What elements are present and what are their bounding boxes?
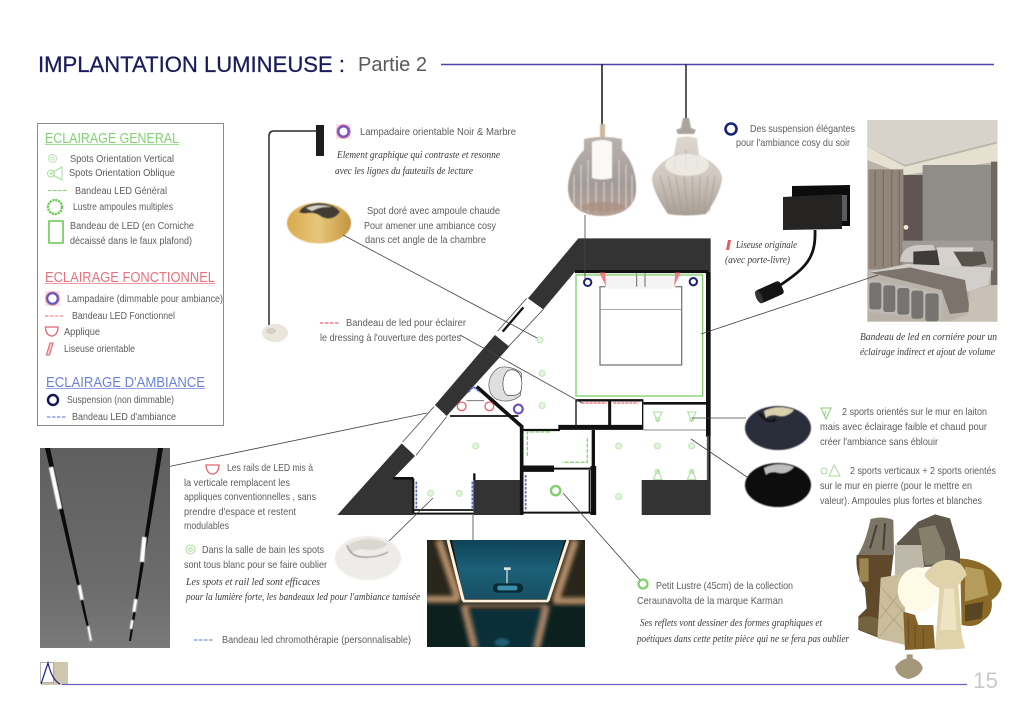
reading light markers bbox=[599, 273, 681, 287]
script note: bedroom: Bandeau de led en corniére pour un bbox=[860, 332, 997, 343]
text: led rails: modulables bbox=[184, 520, 229, 532]
text: dressing led strip bbox=[320, 317, 466, 344]
icon: floor lamp bbox=[45, 291, 60, 306]
text: small chandelier: Petit Lustre (45cm) de la collection bbox=[656, 580, 793, 592]
image: chandelier bbox=[856, 514, 1002, 679]
connector: bedroom photo bbox=[701, 275, 878, 334]
pendant: faceted glass bbox=[652, 118, 722, 216]
interior walls bbox=[393, 272, 710, 515]
right amber body bbox=[960, 558, 1002, 626]
image: bathroom photo bbox=[427, 540, 585, 647]
text: chromotherapy strip: Bandeau led chromothérapie (personnalisable) bbox=[222, 634, 411, 646]
script note: liseuse bbox=[725, 240, 797, 266]
image: white spot bbox=[335, 536, 401, 580]
title: IMPLANTATION LUMINEUSE : bbox=[38, 52, 345, 77]
legend text: spots oblique: Spots Orientation Oblique bbox=[69, 168, 175, 179]
wall lights bbox=[457, 402, 494, 411]
text: dressing led strip: Bandeau de led pour éclairer bbox=[346, 317, 466, 329]
legend text: suspension: Suspension (non dimmable) bbox=[67, 395, 174, 406]
page number: 15 bbox=[973, 668, 998, 693]
dressing led strips bbox=[582, 401, 638, 405]
connector: pendants bbox=[584, 215, 586, 280]
connector: rail photo bbox=[162, 413, 427, 468]
script note: liseuse: Liseuse originale bbox=[735, 240, 797, 251]
script note: spots and rails bbox=[185, 577, 420, 603]
image: led rail photo bbox=[40, 448, 170, 648]
floor plan bbox=[337, 238, 711, 515]
green led strips bbox=[527, 432, 587, 462]
legend text: bandeau fonctionnel: Bandeau LED Fonctionnel bbox=[72, 311, 175, 322]
top center bbox=[897, 514, 960, 568]
image: bedroom photo bbox=[867, 120, 997, 322]
text: bathroom spots: Dans la salle de bain les spots bbox=[202, 544, 324, 556]
script note: spots and rails: pour la lumière forte, les bandeaux led pour l'ambiance tamisée bbox=[185, 592, 420, 603]
heading: eclairage fonctionnel: ECLAIRAGE FONCTIONNEL bbox=[45, 269, 215, 286]
text: led rails bbox=[184, 462, 316, 532]
text: lampadaire: Lampadaire orientable Noir & Marbre bbox=[360, 126, 516, 138]
script note: lampadaire: avec les lignes du fauteuils de lecture bbox=[335, 166, 473, 177]
icon: vertical spot bbox=[48, 154, 56, 162]
text: white spots on stone wall bbox=[820, 465, 996, 507]
legend text: spots vertical: Spots Orientation Vertical bbox=[70, 154, 174, 165]
connector: bathroom photo bbox=[472, 515, 474, 542]
image: floor lamp bbox=[262, 125, 324, 342]
oblique spots bbox=[653, 412, 696, 479]
icon: suspension marker bbox=[726, 124, 736, 134]
text: small chandelier bbox=[637, 580, 793, 607]
image: pendant lights bbox=[568, 64, 722, 216]
header rule bbox=[441, 64, 994, 66]
script note: lampadaire bbox=[335, 150, 500, 177]
text: suspensions: pour l'ambiance cosy du soir bbox=[736, 137, 850, 149]
icon: oblique spot bbox=[48, 167, 62, 180]
blue led strips bbox=[416, 387, 526, 510]
small pendant bbox=[895, 654, 923, 679]
pendant: rounded glass bbox=[568, 124, 636, 216]
text: bathroom spots: sont tous blanc pour se faire oublier bbox=[184, 559, 327, 571]
icon: ambience led strip bbox=[47, 416, 66, 418]
text: led rails: appliques conventionnelles , sans bbox=[184, 491, 316, 503]
image: reading lamp bbox=[753, 185, 850, 304]
legend text: lustre: Lustre ampoules multiples bbox=[73, 202, 173, 213]
script note: chandelier: Ses reflets vont dessiner des formes graphiques et bbox=[640, 618, 823, 629]
panel: legend bbox=[38, 124, 224, 426]
pendant markers bbox=[584, 278, 697, 286]
image: dark navy spot bbox=[745, 406, 811, 450]
vertical spots bbox=[428, 337, 695, 500]
legend text: liseuse: Liseuse orientable bbox=[64, 344, 135, 355]
script note: liseuse: (avec porte-livre) bbox=[725, 255, 790, 266]
script note: bedroom: éclairage indirect et ajout de volume bbox=[860, 347, 995, 358]
icon: general led strip bbox=[48, 190, 68, 192]
title: Partie 2 bbox=[358, 54, 427, 76]
text: white spots on stone wall: sur le mur en pierre (pour le mettre en bbox=[820, 480, 972, 492]
legend text: bandeau corniche: Bandeau de LED (en Corniche bbox=[70, 221, 194, 232]
legend text: bandeau general: Bandeau LED Général bbox=[75, 186, 167, 197]
exterior walls bbox=[337, 238, 711, 515]
icon: cornice strip bbox=[49, 221, 63, 243]
script note: chandelier bbox=[636, 618, 850, 645]
text: warm oriented spots bbox=[820, 406, 987, 448]
text: warm oriented spots: 2 sports orientés sur le mur en laiton bbox=[842, 406, 987, 418]
text: led rails: Les rails de LED mis à bbox=[227, 462, 313, 474]
floor lamp marker bbox=[513, 404, 524, 414]
text: spot dore: Pour amener une ambiance cosy bbox=[364, 220, 497, 232]
legend text: bandeau corniche bbox=[70, 221, 194, 247]
text: white spots on stone wall: valeur). Ampoules plus fortes et blanches bbox=[820, 495, 982, 507]
script note: spots and rails: Les spots et rail led sont efficaces bbox=[185, 577, 320, 588]
armchair bbox=[489, 367, 522, 401]
text: spot dore: Spot doré avec ampoule chaude bbox=[367, 205, 500, 217]
general led cornice bbox=[576, 275, 703, 396]
text: white spots on stone wall: 2 sports verticaux + 2 sports orientés bbox=[850, 465, 996, 477]
text: suspensions bbox=[736, 123, 855, 149]
connector: spot 1 bbox=[692, 417, 746, 419]
text: led rails: la verticale remplacent les bbox=[184, 477, 290, 489]
legend text: applique: Applique bbox=[64, 327, 100, 338]
bed bbox=[600, 273, 682, 365]
connector: dressing bbox=[460, 335, 582, 403]
icon: functional led strip bbox=[45, 315, 64, 317]
windows bbox=[403, 298, 543, 455]
text: spot dore bbox=[364, 205, 500, 246]
text: warm oriented spots: mais avec éclairage faible et chaud pour bbox=[820, 421, 987, 433]
footer rule bbox=[62, 684, 967, 686]
script note: bedroom bbox=[860, 332, 997, 358]
icon: reading light bbox=[46, 343, 53, 355]
small chandelier marker bbox=[551, 486, 560, 495]
heading: eclairage d'ambiance: ECLAIRAGE D'AMBIANCE bbox=[46, 374, 205, 391]
image: gold spot bbox=[287, 202, 351, 244]
script note: chandelier: poétiques dans cette petite pièce qui ne se fera pas oublier bbox=[636, 634, 850, 645]
icon: pendant bbox=[48, 395, 58, 405]
lower centre bbox=[903, 612, 935, 650]
heading: eclairage general: ECLAIRAGE GENERAL bbox=[45, 130, 179, 147]
icon: lampadaire marker bbox=[336, 124, 351, 139]
text: led rails: prendre d'espace et restent bbox=[184, 506, 296, 518]
connector: gold spot bbox=[343, 235, 537, 338]
image: black spot bbox=[745, 463, 811, 507]
text: small chandelier: Ceraunavolta de la marque Karman bbox=[637, 595, 783, 607]
top left lamp bbox=[857, 518, 894, 557]
icon: reading light marker bbox=[726, 240, 731, 250]
icon: multi-bulb chandelier bbox=[48, 200, 62, 214]
left mesh panel bbox=[877, 573, 905, 645]
connector: chandelier bbox=[563, 493, 640, 580]
text: suspensions: Des suspension élégantes bbox=[750, 123, 855, 135]
text: dressing led strip: le dressing à l'ouverture des portes bbox=[320, 332, 461, 344]
glowing centre bbox=[898, 567, 939, 613]
text: bathroom spots bbox=[184, 544, 327, 571]
legend text: lampadaire: Lampadaire (dimmable pour ambiance) bbox=[67, 294, 223, 305]
script note: lampadaire: Element graphique qui contraste et resonne bbox=[336, 150, 500, 161]
right column bbox=[925, 560, 967, 650]
legend text: bandeau ambiance: Bandeau LED d'ambiance bbox=[72, 412, 176, 423]
connector: spot 2 bbox=[691, 439, 747, 477]
logo bbox=[40, 662, 68, 685]
text: spot dore: dans cet angle de la chambre bbox=[365, 234, 486, 246]
legend text: bandeau corniche: décaissé dans le faux plafond) bbox=[70, 236, 192, 247]
icon: wall light bbox=[46, 327, 58, 336]
left amber body bbox=[856, 555, 893, 638]
text: warm oriented spots: créer l'ambiance sans éblouir bbox=[820, 436, 938, 448]
connector: white spot bbox=[387, 498, 433, 543]
